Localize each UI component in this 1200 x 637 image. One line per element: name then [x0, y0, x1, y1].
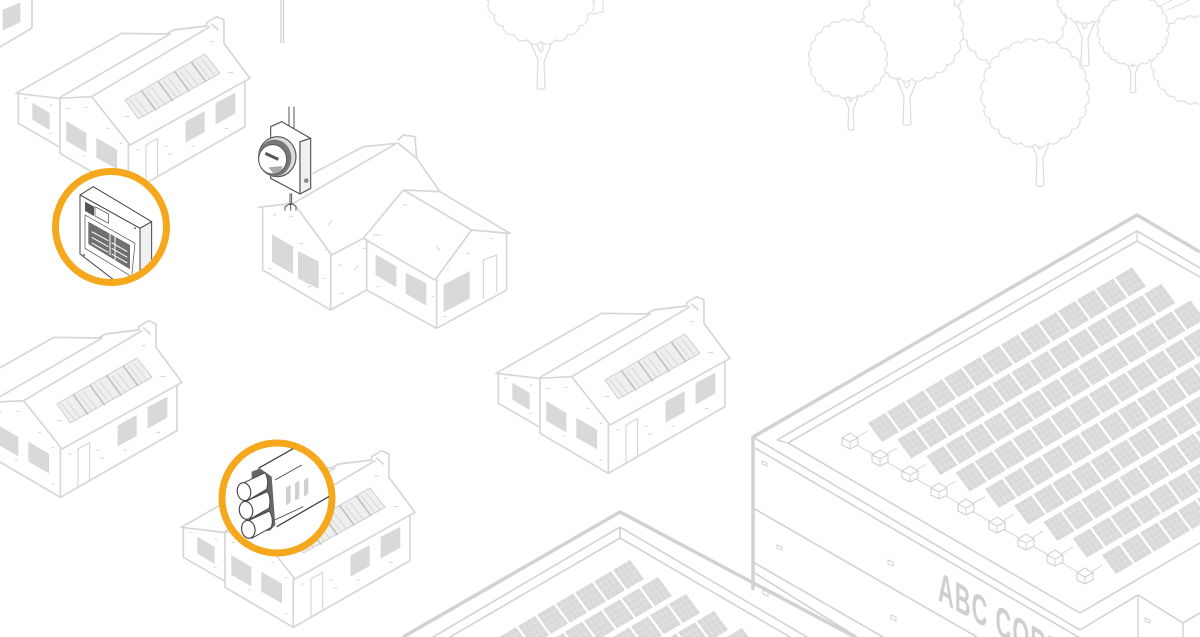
combiner boxes and connectors: [842, 431, 1102, 584]
meter enclosure: [271, 122, 311, 194]
icon: breaker panel: [80, 186, 152, 279]
house with solar panels, bottom: [181, 451, 415, 627]
outer parapet: [753, 215, 1200, 590]
house with solar panels, middle left: [0, 321, 182, 497]
lower building roof fill: [403, 512, 830, 637]
building wall fill: [753, 215, 1200, 637]
solar array on lower building roof: [500, 560, 748, 637]
house with solar panels, centre: [496, 297, 730, 473]
callout: breaker panel: [56, 172, 166, 300]
house without solar panels, with meter: [258, 135, 510, 328]
house fragment, top-left corner: [0, 0, 32, 47]
meter dial: [259, 137, 296, 177]
lower inner parapet: [433, 527, 807, 637]
inner parapet lines: [777, 231, 1200, 443]
meter wires: [285, 107, 296, 211]
big commercial building: [753, 215, 1200, 637]
orange ring: [222, 443, 332, 553]
lower commercial building: [403, 512, 855, 637]
callout: conduit cable: [222, 443, 333, 553]
house with solar panels, top left: [16, 17, 250, 193]
icon: electricity meter: [258, 107, 311, 211]
tree cluster, upper centre: [485, 0, 603, 90]
orange ring: [56, 172, 166, 282]
wall rivets: [762, 461, 1150, 623]
utility pole stub: [281, 0, 284, 43]
icon: conduit bundle: [236, 447, 333, 539]
solar array on big building roof: [868, 267, 1200, 574]
tree cluster, upper right: [809, 0, 1200, 186]
roof front edge: [788, 443, 1200, 613]
lower outer parapet: [403, 512, 855, 637]
